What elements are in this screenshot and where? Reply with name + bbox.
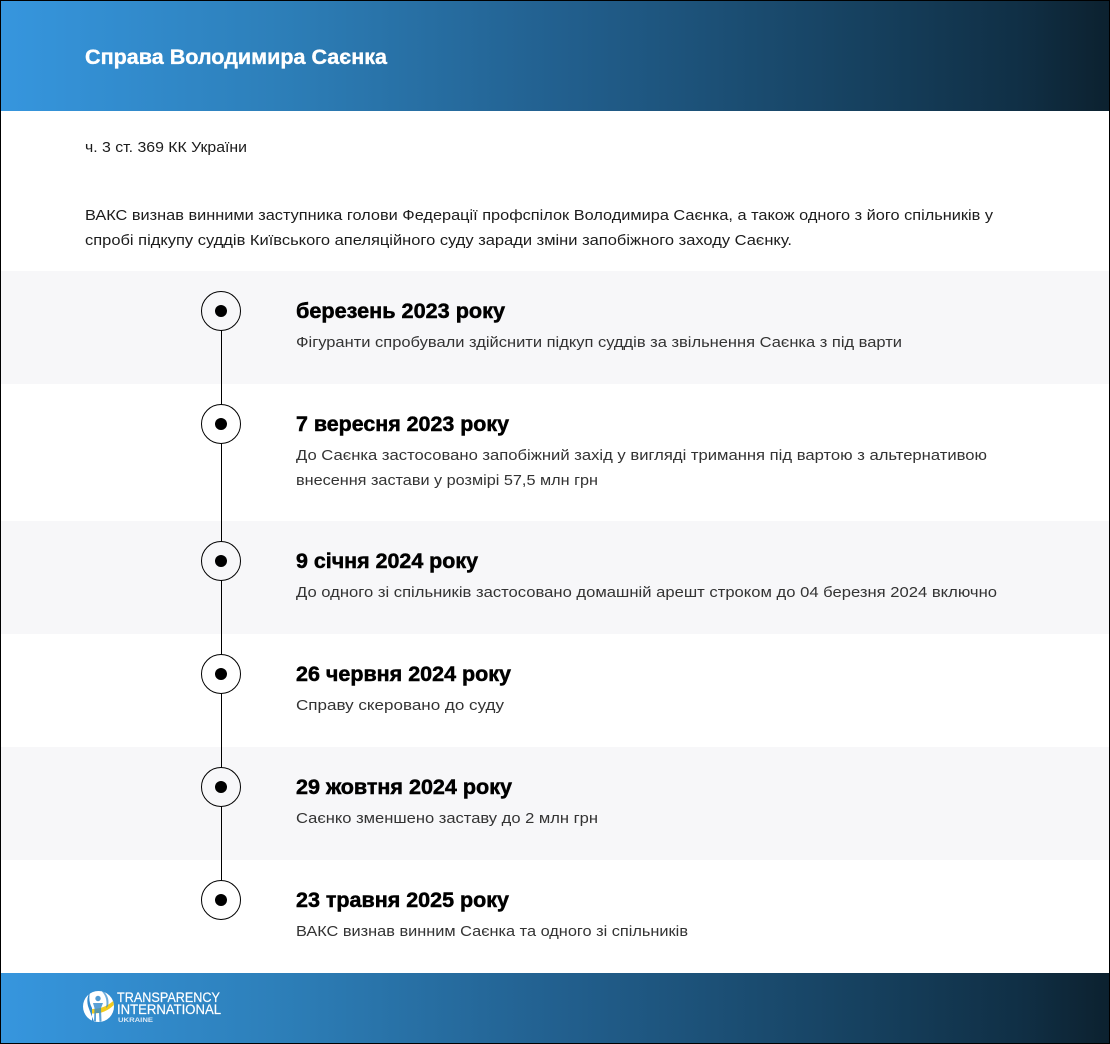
description: Саєнко зменшено заставу до 2 млн грн [296, 810, 598, 827]
wordmark: INTERNATIONAL [117, 1002, 221, 1017]
legal article reference: ч. 3 ст. 369 КК України [85, 139, 247, 156]
footer band [1, 973, 1109, 1043]
title: Справа Володимира Саєнка [85, 46, 387, 69]
description: До одного зі спільників застосовано домашній арешт строком до 04 березня 2024 включно [296, 584, 997, 601]
wordmark [117, 990, 221, 1024]
timeline event: 7 September 2023 [202, 404, 987, 489]
summary paragraph [85, 207, 994, 249]
description: ВАКС визнав винним Саєнка та одного зі спільників [296, 923, 688, 940]
date: березень 2023 року [296, 300, 505, 323]
timeline row backgrounds [1, 271, 1109, 860]
description: Фігуранти спробували здійснити підкуп суддів за звільнення Саєнка з під варти [296, 334, 902, 351]
marker [202, 404, 240, 444]
date: 26 червня 2024 року [296, 663, 511, 686]
timeline event: March 2023 [202, 292, 902, 351]
header band [1, 1, 1109, 111]
description: внесення застави у розмірі 57,5 млн грн [296, 472, 598, 489]
description: До Саєнка застосовано запобіжний захід у вигляді тримання під вартою з альтернативою [296, 447, 987, 464]
timeline event: 9 January 2024 [202, 542, 997, 601]
date: 7 вересня 2023 року [296, 413, 509, 436]
summary paragraph: ВАКС визнав винними заступника голови Федерації профспілок Володимира Саєнка, а також одного з його спільників у [85, 207, 994, 224]
marker [202, 880, 240, 920]
timeline event: 23 May 2025 [202, 880, 688, 940]
icon: globe with figure [83, 991, 114, 1022]
date: 23 травня 2025 року [296, 889, 509, 912]
date: 29 жовтня 2024 року [296, 776, 512, 799]
marker [202, 654, 240, 694]
marker [202, 768, 240, 806]
timeline event: 26 June 2024 [202, 654, 511, 714]
description: Справу скеровано до суду [296, 697, 505, 714]
description [296, 447, 987, 489]
logo: Transparency International Ukraine [83, 990, 221, 1024]
date: 9 січня 2024 року [296, 550, 478, 573]
timeline event: 29 October 2024 [202, 768, 598, 827]
wordmark: UKRAINE [118, 1017, 154, 1024]
marker [202, 292, 240, 330]
summary paragraph: спробі підкупу суддів Київського апеляційного суду заради зміни запобіжного заходу Саєнку. [85, 232, 792, 249]
timeline axis line [220, 311, 222, 900]
marker [202, 542, 240, 580]
wordmark: TRANSPARENCY [117, 990, 220, 1005]
